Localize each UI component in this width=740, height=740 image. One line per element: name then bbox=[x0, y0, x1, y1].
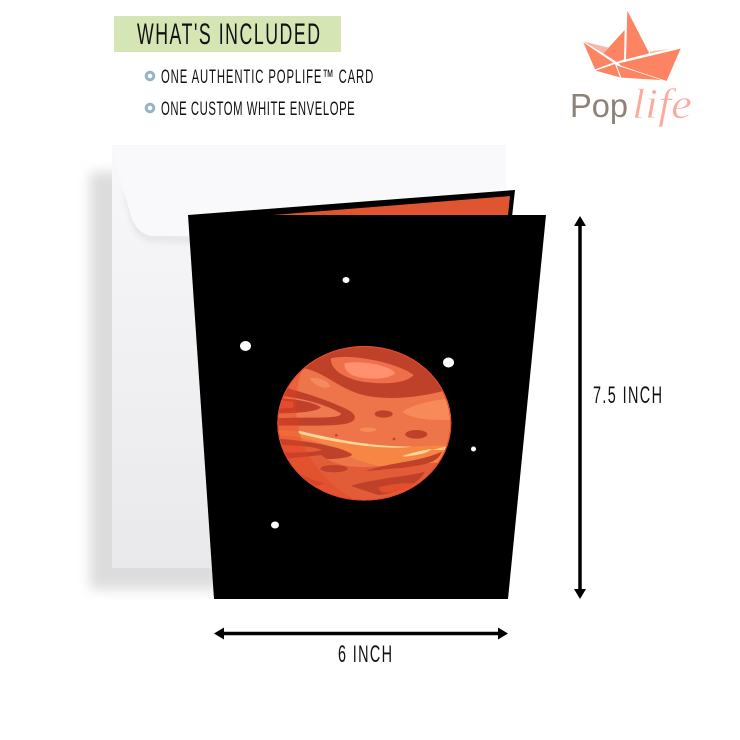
planet illustration bbox=[275, 343, 455, 505]
envelope flap bbox=[112, 146, 506, 237]
card front bbox=[188, 215, 546, 599]
item: poplife card: ONE AUTHENTIC POPLIFE™ CARD bbox=[161, 67, 373, 88]
list of included items bbox=[146, 67, 373, 120]
logo: poplife bbox=[570, 11, 692, 128]
arrow: width bbox=[214, 628, 508, 640]
heading: what's included: WHAT'S INCLUDED bbox=[137, 19, 320, 51]
envelope shadow bbox=[90, 172, 220, 589]
card back panel bbox=[188, 190, 515, 217]
label: height: 7.5 INCH bbox=[593, 382, 662, 409]
left swirls bbox=[275, 385, 355, 426]
stars bbox=[240, 277, 476, 528]
envelope flap shadow bbox=[122, 190, 200, 244]
lower bands bbox=[275, 438, 352, 459]
item: white envelope: ONE CUSTOM WHITE ENVELOPE bbox=[161, 99, 355, 120]
top band bbox=[305, 346, 447, 398]
label: width: 6 INCH bbox=[338, 641, 392, 668]
icon: origami boat bbox=[583, 11, 681, 81]
arrow: height bbox=[574, 216, 586, 599]
infographic canvas bbox=[86, 10, 690, 662]
logo wordmark bbox=[570, 82, 692, 128]
limb bbox=[278, 372, 352, 498]
logo wordmark: Pop bbox=[570, 87, 628, 124]
light band bbox=[275, 430, 452, 470]
spots bbox=[375, 410, 393, 418]
envelope bbox=[112, 145, 506, 568]
logo wordmark: life bbox=[632, 82, 692, 128]
